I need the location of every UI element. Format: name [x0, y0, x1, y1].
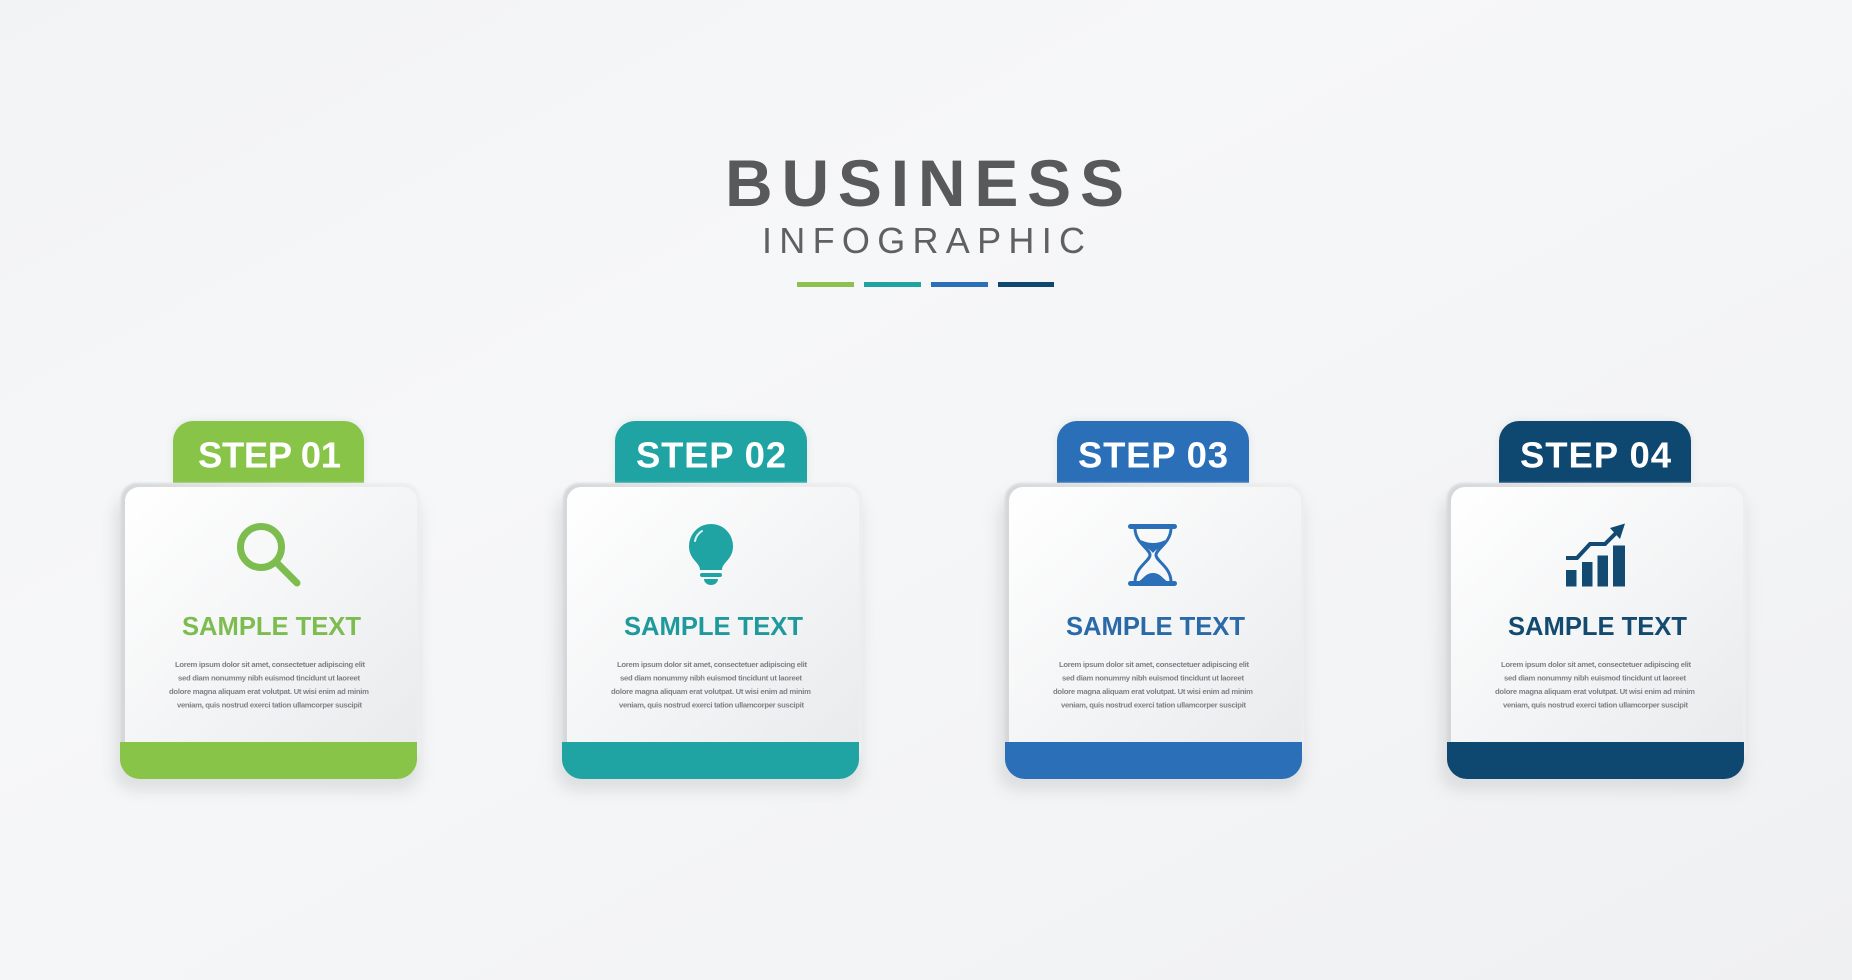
body text: sed diam nonummy nibh euismod tincidunt ut laoreet [1504, 674, 1686, 682]
subheading: SAMPLE TEXT [1066, 613, 1245, 641]
body text: veniam, quis nostrud exerci tation ullamcorper suscipit [619, 700, 804, 710]
bottom band [562, 742, 859, 779]
step tab: STEP 03 [1078, 434, 1228, 476]
body text: Lorem ipsum dolor sit amet, consectetuer adipiscing elit [1501, 660, 1691, 669]
body text: veniam, quis nostrud exerci tation ullamcorper suscipit [177, 700, 362, 710]
body text: sed diam nonummy nibh euismod tincidunt ut laoreet [1062, 674, 1244, 682]
card body [1005, 483, 1304, 763]
card body [1447, 483, 1746, 763]
body text: dolore magna aliquam erat volutpat. Ut wisi enim ad minim [611, 687, 811, 696]
card body [121, 483, 420, 763]
step tab: STEP 02 [636, 434, 786, 476]
bottom band [120, 742, 417, 779]
icon: hourglass [1128, 524, 1177, 586]
step tab [1499, 421, 1691, 483]
panel: step 03 [998, 421, 1304, 791]
title colour bars [797, 282, 1054, 287]
bottom band [1447, 742, 1744, 779]
body text: dolore magna aliquam erat volutpat. Ut wisi enim ad minim [169, 687, 369, 696]
body text: dolore magna aliquam erat volutpat. Ut wisi enim ad minim [1495, 687, 1695, 696]
subheading: SAMPLE TEXT [624, 613, 803, 641]
body text: dolore magna aliquam erat volutpat. Ut wisi enim ad minim [1053, 687, 1253, 696]
body text [169, 660, 369, 710]
body text: veniam, quis nostrud exerci tation ullamcorper suscipit [1061, 700, 1246, 710]
subheading: SAMPLE TEXT [182, 613, 361, 641]
body text: Lorem ipsum dolor sit amet, consectetuer adipiscing elit [617, 660, 807, 669]
icon: magnifying glass [240, 526, 297, 583]
panel: step 04 [1440, 421, 1746, 791]
step tab [615, 421, 807, 483]
subheading: SAMPLE TEXT [1508, 613, 1687, 641]
body text [611, 660, 811, 710]
body text: veniam, quis nostrud exerci tation ullamcorper suscipit [1503, 700, 1688, 710]
title [725, 146, 1124, 261]
heading: infographic: INFOGRAPHIC [762, 220, 1085, 261]
panel: step 01 [114, 421, 420, 791]
panel: step 02 [556, 421, 862, 791]
body text [1495, 660, 1695, 710]
heading: business: BUSINESS [725, 146, 1124, 220]
step tab [173, 421, 364, 483]
step tab: STEP 01 [198, 434, 341, 476]
body text: sed diam nonummy nibh euismod tincidunt ut laoreet [620, 674, 802, 682]
card body [563, 483, 862, 763]
body text: Lorem ipsum dolor sit amet, consectetuer adipiscing elit [175, 660, 365, 669]
body text: sed diam nonummy nibh euismod tincidunt ut laoreet [178, 674, 360, 682]
bottom band [1005, 742, 1302, 779]
step tab [1057, 421, 1249, 483]
icon: growth chart [1566, 524, 1625, 586]
step tab: STEP 04 [1520, 434, 1672, 476]
icon: light bulb [689, 524, 733, 585]
body text: Lorem ipsum dolor sit amet, consectetuer adipiscing elit [1059, 660, 1249, 669]
body text [1053, 660, 1253, 710]
